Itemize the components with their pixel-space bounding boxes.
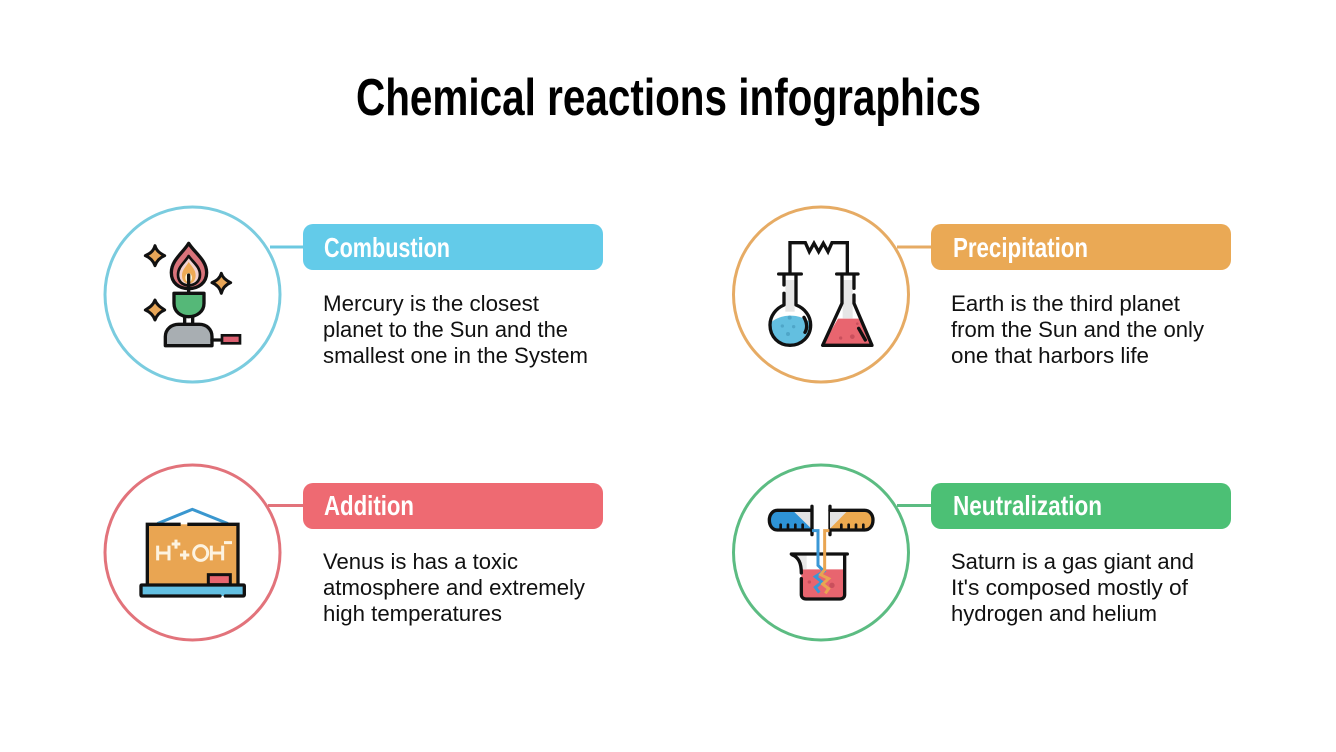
text: addition description: high temperatures: [323, 601, 502, 626]
text: addition description: atmosphere and extremely: [323, 575, 586, 600]
heading: neutralization: Neutralization: [953, 490, 1102, 521]
text: precipitation description: from the Sun and the only: [951, 317, 1205, 342]
text: neutralization description: It's composed mostly of: [951, 575, 1189, 600]
text: neutralization description: [951, 549, 1194, 626]
text: precipitation description: [951, 291, 1205, 368]
text: combustion description: [323, 291, 588, 368]
icon: test tubes and beaker: [769, 506, 873, 599]
panel: precipitation: [734, 207, 1231, 382]
text: combustion description: smallest one in the System: [323, 343, 588, 368]
text: neutralization description: Saturn is a gas giant and: [951, 549, 1194, 574]
text: addition description: [323, 549, 586, 626]
text: precipitation description: one that harbors life: [951, 343, 1149, 368]
circle: neutralization: [734, 465, 908, 640]
connector: addition: [268, 504, 304, 507]
circle: precipitation: [734, 207, 908, 382]
connector: combustion: [270, 246, 304, 248]
label pill: precipitation: [931, 224, 1231, 270]
connector: precipitation: [897, 246, 932, 248]
icon: bunsen burner: [145, 243, 240, 346]
icon: chalkboard: [141, 509, 244, 596]
label pill: combustion: [303, 224, 603, 270]
text: precipitation description: Earth is the third planet: [951, 291, 1181, 316]
heading: combustion: Combustion: [324, 232, 450, 263]
label pill: addition: [303, 483, 603, 529]
connector: neutralization: [897, 504, 932, 507]
panel: neutralization: [734, 465, 1231, 640]
label pill: neutralization: [931, 483, 1231, 529]
circle: combustion: [105, 207, 280, 382]
text: neutralization description: hydrogen and helium: [951, 601, 1157, 626]
title: Chemical reactions infographics: [356, 69, 981, 127]
panel: combustion: [105, 207, 603, 382]
heading: addition: Addition: [324, 490, 414, 521]
text: combustion description: planet to the Sun and the: [323, 317, 568, 342]
text: combustion description: Mercury is the closest: [323, 291, 540, 316]
text: addition description: Venus is has a toxic: [323, 549, 518, 574]
icon: connected flasks: [770, 243, 872, 345]
heading: precipitation: Precipitation: [953, 232, 1088, 263]
circle: addition: [105, 465, 280, 640]
panel: addition: [105, 465, 603, 640]
